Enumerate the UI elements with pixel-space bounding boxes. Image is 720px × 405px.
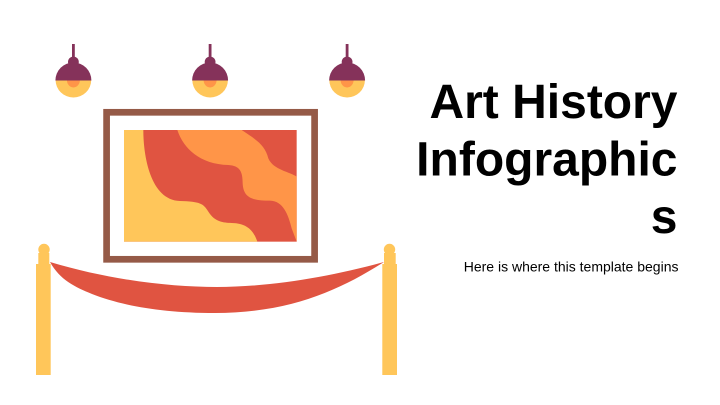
title bbox=[416, 76, 678, 244]
velvet rope bbox=[50, 262, 384, 313]
icon: lamp left bbox=[55, 44, 91, 97]
icon: lamp centre bbox=[192, 44, 228, 97]
title: Art History bbox=[429, 76, 678, 129]
icon: lamp right bbox=[329, 44, 365, 98]
framed painting bbox=[107, 112, 315, 259]
abstract wave artwork bbox=[124, 130, 297, 242]
title: s bbox=[651, 191, 678, 244]
picture frame bbox=[107, 112, 315, 259]
title: Infographic bbox=[416, 134, 678, 186]
rope post right bbox=[382, 244, 397, 375]
rope post left bbox=[36, 244, 51, 375]
subtitle: Here is where this template begins bbox=[464, 258, 678, 274]
